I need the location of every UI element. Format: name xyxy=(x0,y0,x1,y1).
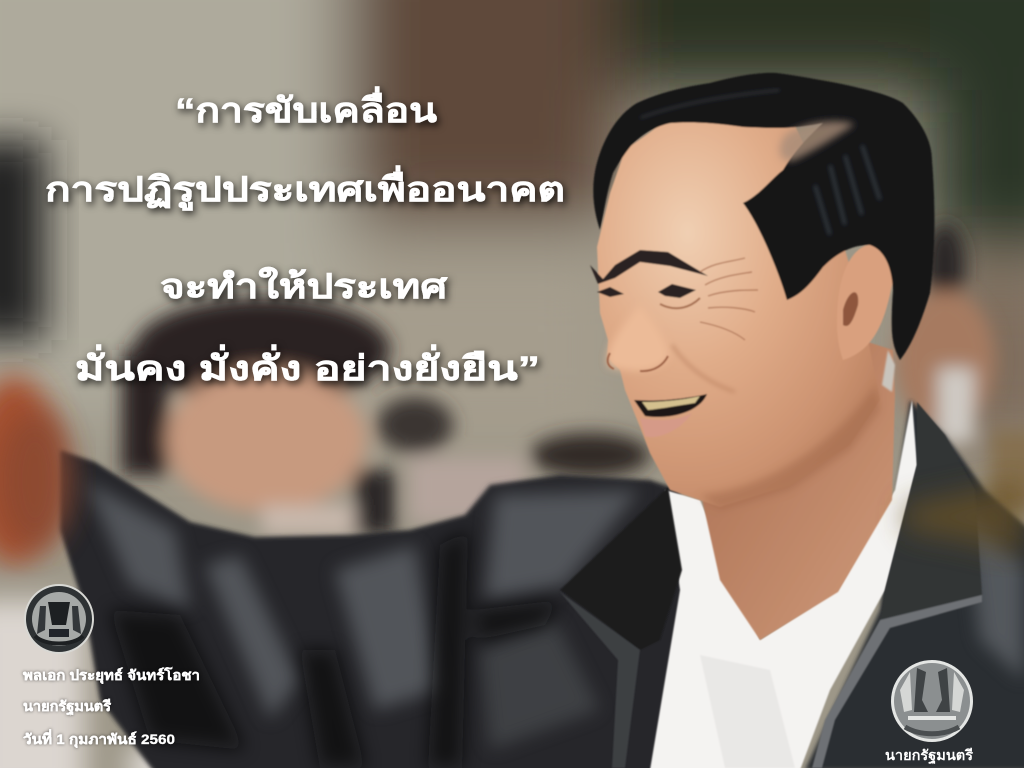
shirt xyxy=(650,400,917,768)
face xyxy=(597,115,880,507)
eyebrows xyxy=(590,250,708,284)
signature block: วันที่ 1 กุมภาพันธ์ 2560 xyxy=(23,729,175,748)
jacket collar xyxy=(560,402,982,768)
neck xyxy=(700,330,895,640)
headline quote: จะทำให้ประเทศ xyxy=(160,266,448,306)
grey sideburn xyxy=(882,350,895,392)
ear xyxy=(837,245,893,360)
signature block: นายกรัฐมนตรี xyxy=(23,698,111,716)
thinning scalp xyxy=(780,121,855,161)
headline quote: มั่นคง มั่งคั่ง อย่างยั่งยืน” xyxy=(75,344,540,388)
hair sheen xyxy=(815,145,880,235)
signature block: พลเอก ประยุทธ์ จันทร์โอชา xyxy=(23,666,200,684)
headline quote: “การขับเคลื่อน xyxy=(175,86,437,130)
blurred hand at left edge xyxy=(0,410,73,550)
headline quote xyxy=(45,86,565,388)
eyes xyxy=(597,287,624,297)
nose xyxy=(607,305,668,371)
portrait head xyxy=(590,73,934,640)
jacket folds and highlights xyxy=(85,480,1024,750)
hair xyxy=(593,73,934,360)
jacket xyxy=(60,400,1024,768)
government emblem badge xyxy=(24,584,94,654)
jacket emblem xyxy=(885,660,973,765)
headline quote: การปฏิรูปประเทศเพื่ออนาคต xyxy=(45,165,565,211)
signature block xyxy=(23,666,200,748)
mouth and smile xyxy=(634,394,707,417)
jacket emblem: นายกรัฐมนตรี xyxy=(885,747,973,765)
jaw shadow xyxy=(700,385,880,510)
foreground blur at jacket right xyxy=(905,480,1024,555)
wrinkles xyxy=(700,258,758,340)
